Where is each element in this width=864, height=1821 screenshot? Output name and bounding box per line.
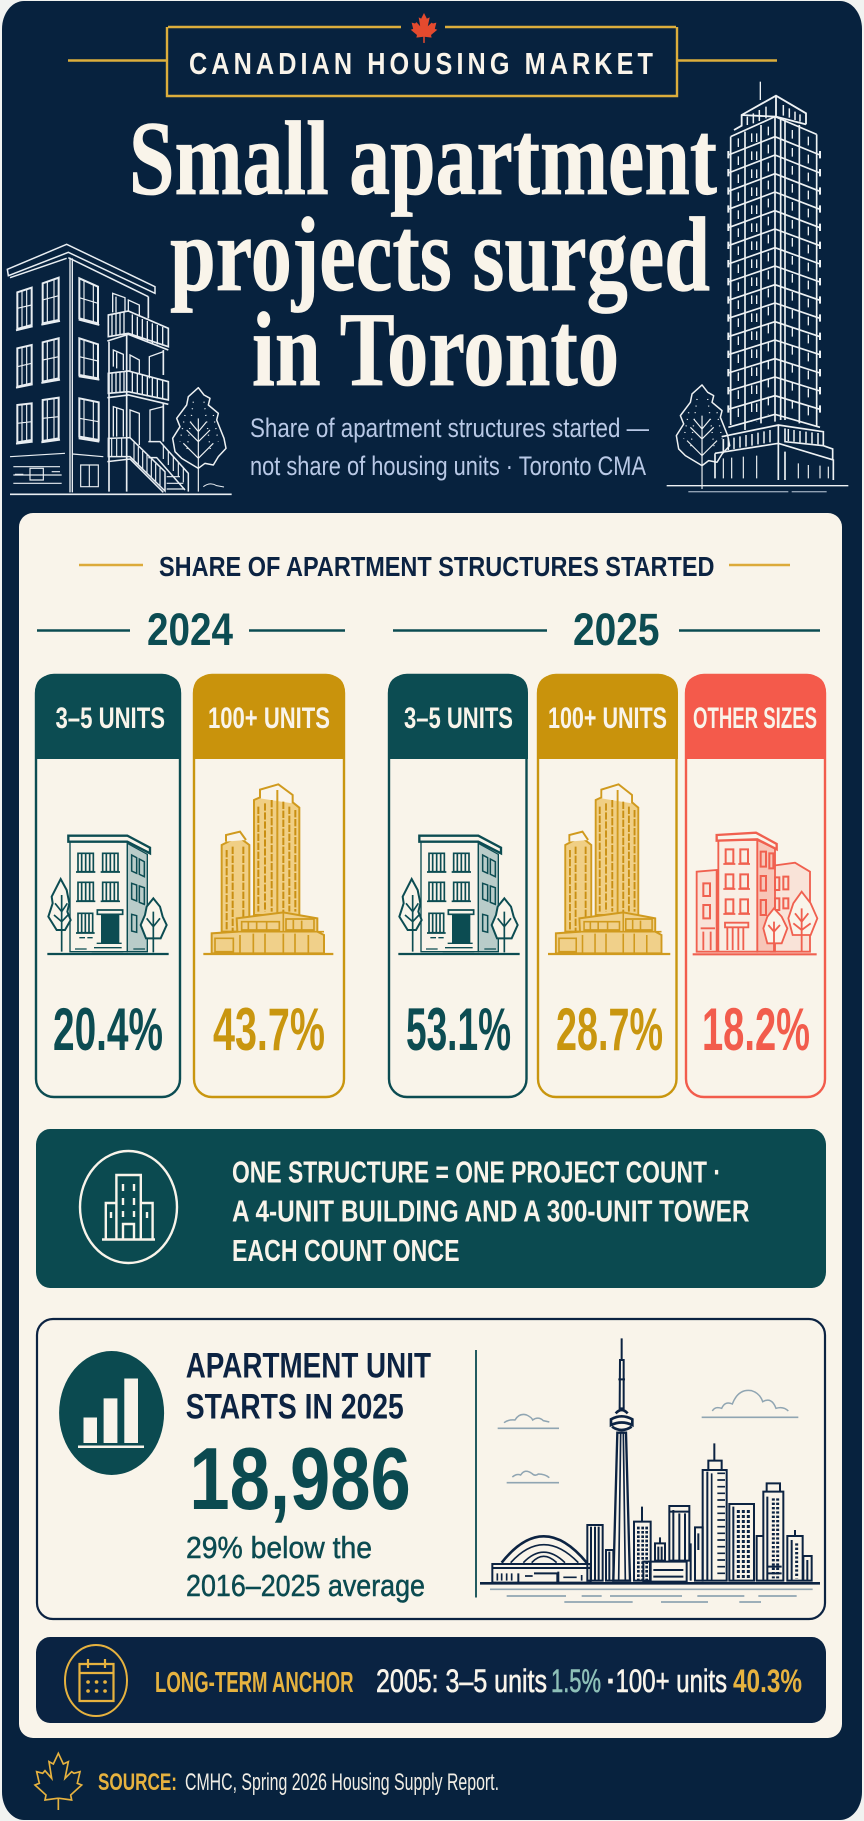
stat heading xyxy=(186,1346,431,1426)
footer source: SOURCE: xyxy=(98,1769,177,1796)
icon: small apartment building xyxy=(47,836,169,954)
stat note: 29% below the xyxy=(186,1530,372,1565)
card: 2025 100+ units xyxy=(537,675,678,1097)
callout: long-term anchor xyxy=(36,1637,826,1723)
stat number: 18,986 xyxy=(189,1429,411,1528)
values: 1.5% xyxy=(551,1663,601,1699)
stat heading: STARTS IN 2025 xyxy=(186,1388,404,1426)
card: 2025 3-5 units: 53.1% xyxy=(406,996,511,1063)
illustration: left tree xyxy=(173,388,226,492)
illustration: high-rise tower line art xyxy=(667,82,848,492)
kicker text: CANADIAN HOUSING MARKET xyxy=(189,46,657,81)
title: in Toronto xyxy=(252,291,619,408)
badge rules xyxy=(68,27,777,96)
title xyxy=(129,100,717,408)
icon: maple leaf outline xyxy=(35,1753,82,1810)
subtitle: Share of apartment structures started — xyxy=(250,413,649,443)
subtitle: not share of housing units · Toronto CMA xyxy=(250,451,646,481)
callout text: EACH COUNT ONCE xyxy=(232,1233,460,1268)
panel: apartment unit starts xyxy=(37,1319,825,1619)
values: · xyxy=(606,1663,617,1699)
card: 2025 other sizes xyxy=(685,675,826,1097)
stat heading: APARTMENT UNIT xyxy=(186,1346,431,1386)
values: 100+ units xyxy=(616,1663,727,1699)
year heading 2024: 2024 xyxy=(147,604,233,655)
main cream panel xyxy=(19,513,842,1738)
stat note: 2016–2025 average xyxy=(186,1568,425,1603)
icon: calendar in circle xyxy=(65,1645,127,1716)
divider xyxy=(475,1350,477,1598)
icon: tall towers xyxy=(548,784,670,954)
icon: red maple leaf xyxy=(411,13,437,43)
header: kicker badge xyxy=(68,13,777,96)
card: 2024 3-5 units: 20.4% xyxy=(53,996,163,1063)
callout text xyxy=(232,1154,750,1268)
card: 2024 3-5 units xyxy=(35,675,181,1097)
footer source: CMHC, Spring 2026 Housing Supply Report. xyxy=(185,1769,499,1796)
card: 2024 3-5 units: 3–5 UNITS xyxy=(56,702,165,735)
card: 2025 3-5 units xyxy=(388,675,528,1097)
card: 2024 100+ units: 100+ UNITS xyxy=(208,702,330,735)
subtitle xyxy=(250,413,649,481)
label: LONG-TERM ANCHOR xyxy=(155,1667,354,1699)
values: 40.3% xyxy=(733,1663,802,1699)
icon: small apartment building xyxy=(398,836,520,954)
year heading 2025: 2025 xyxy=(573,604,660,655)
section heading: SHARE OF APARTMENT STRUCTURES STARTED xyxy=(159,551,714,582)
title: projects surged xyxy=(170,196,710,313)
card: 2024 100+ units xyxy=(193,675,345,1097)
card: 2024 100+ units: 43.7% xyxy=(213,996,325,1063)
values xyxy=(376,1663,802,1699)
illustration: low-rise apartment line art xyxy=(7,244,232,494)
icon: mixed buildings xyxy=(693,833,817,954)
footer source xyxy=(35,1753,499,1810)
illustration: Toronto skyline xyxy=(480,1338,820,1602)
card: 2025 100+ units: 100+ UNITS xyxy=(548,702,667,735)
illustration: right tree xyxy=(676,385,730,489)
stat note xyxy=(186,1530,425,1603)
values: 2005: 3–5 units xyxy=(376,1663,547,1699)
icon: bar chart in circle xyxy=(59,1351,164,1475)
icon: tall towers xyxy=(203,784,333,954)
card: 2025 100+ units: 28.7% xyxy=(556,996,663,1063)
icon: building in circle xyxy=(80,1151,177,1263)
callout: one structure = one project count xyxy=(36,1129,826,1288)
card: 2025 3-5 units: 3–5 UNITS xyxy=(404,702,513,735)
